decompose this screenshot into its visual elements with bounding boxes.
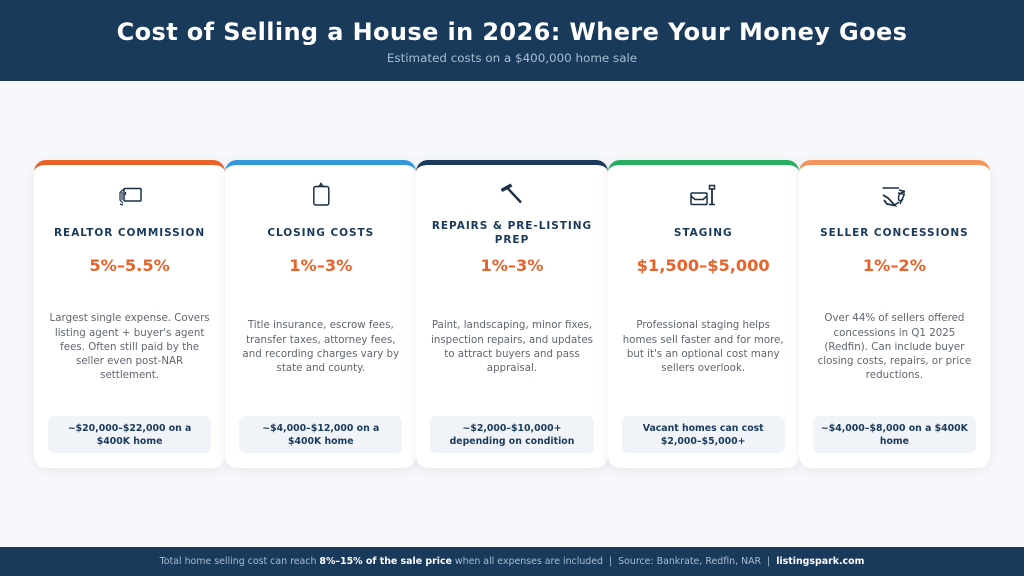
callout: closing costs xyxy=(239,416,402,453)
panel: seller concessions xyxy=(799,160,990,468)
icon: hammer xyxy=(500,184,522,204)
header banner xyxy=(0,0,1024,81)
heading: staging: STAGING xyxy=(674,227,733,239)
title: Cost of Selling a House in 2026: Where Your Money Goes xyxy=(117,18,907,46)
callout: seller concessions xyxy=(813,416,976,453)
description: repairs: Paint, landscaping, minor fixes, inspection repairs, and updates to attract buyers and pass appraisal. xyxy=(431,319,593,374)
panel: repairs and pre-listing prep xyxy=(416,160,608,468)
value: closing costs: 1%–3% xyxy=(289,256,352,275)
callout: realtor commission xyxy=(48,416,211,453)
heading: closing costs: CLOSING COSTS xyxy=(267,227,374,239)
subtitle: Estimated costs on a $400,000 home sale xyxy=(387,51,637,65)
icon: clipboard xyxy=(313,182,330,206)
callout: closing costs: ~$4,000–$12,000 on a $400K home xyxy=(262,422,379,446)
value: staging: $1,500–$5,000 xyxy=(637,256,770,275)
callout: seller concessions: ~$4,000–$8,000 on a $400K home xyxy=(821,422,968,446)
description: closing costs: Title insurance, escrow fees, transfer taxes, attorney fees, and recording charges vary by state and county. xyxy=(242,319,399,374)
description: seller concessions: Over 44% of sellers offered concessions in Q1 2025 (Redfin). Can include buyer closing costs, repairs, or price reductions. xyxy=(818,312,971,381)
callout: repairs: ~$2,000–$10,000+ depending on condition xyxy=(450,422,574,446)
icon: handshake xyxy=(882,187,906,207)
callout: staging xyxy=(622,416,785,453)
value: realtor commission: 5%–5.5% xyxy=(89,256,170,275)
panel: realtor commission xyxy=(34,160,225,468)
callout: realtor commission: ~$20,000–$22,000 on a $400K home xyxy=(68,422,191,446)
panel: staging xyxy=(608,160,799,468)
heading: seller concessions: SELLER CONCESSIONS xyxy=(820,227,969,239)
description: realtor commission: Largest single expense. Covers listing agent + buyer's agent fees. Often still paid by the seller even post-NAR settlement. xyxy=(50,312,210,381)
value: seller concessions: 1%–2% xyxy=(863,256,926,275)
panel: closing costs xyxy=(225,160,416,468)
icon: price tag xyxy=(119,188,142,206)
callout: staging: Vacant homes can cost $2,000–$5,000+ xyxy=(643,422,764,446)
heading: realtor commission: REALTOR COMMISSION xyxy=(54,227,205,239)
description: staging: Professional staging helps homes sell faster and for more, but it's an optional cost many sellers overlook. xyxy=(623,319,784,374)
callout: repairs xyxy=(430,416,594,453)
footer xyxy=(0,547,1024,576)
icon: couch and lamp xyxy=(690,184,716,206)
heading: repairs and pre-listing prep: REPAIRS & PRE-LISTING PREP xyxy=(432,220,592,246)
footer: Total home selling cost can reach 8%–15% of the sale price when all expenses are included | Source: Bankrate, Redfin, NAR | listingspark.com xyxy=(160,556,864,567)
value: repairs: 1%–3% xyxy=(480,256,544,275)
